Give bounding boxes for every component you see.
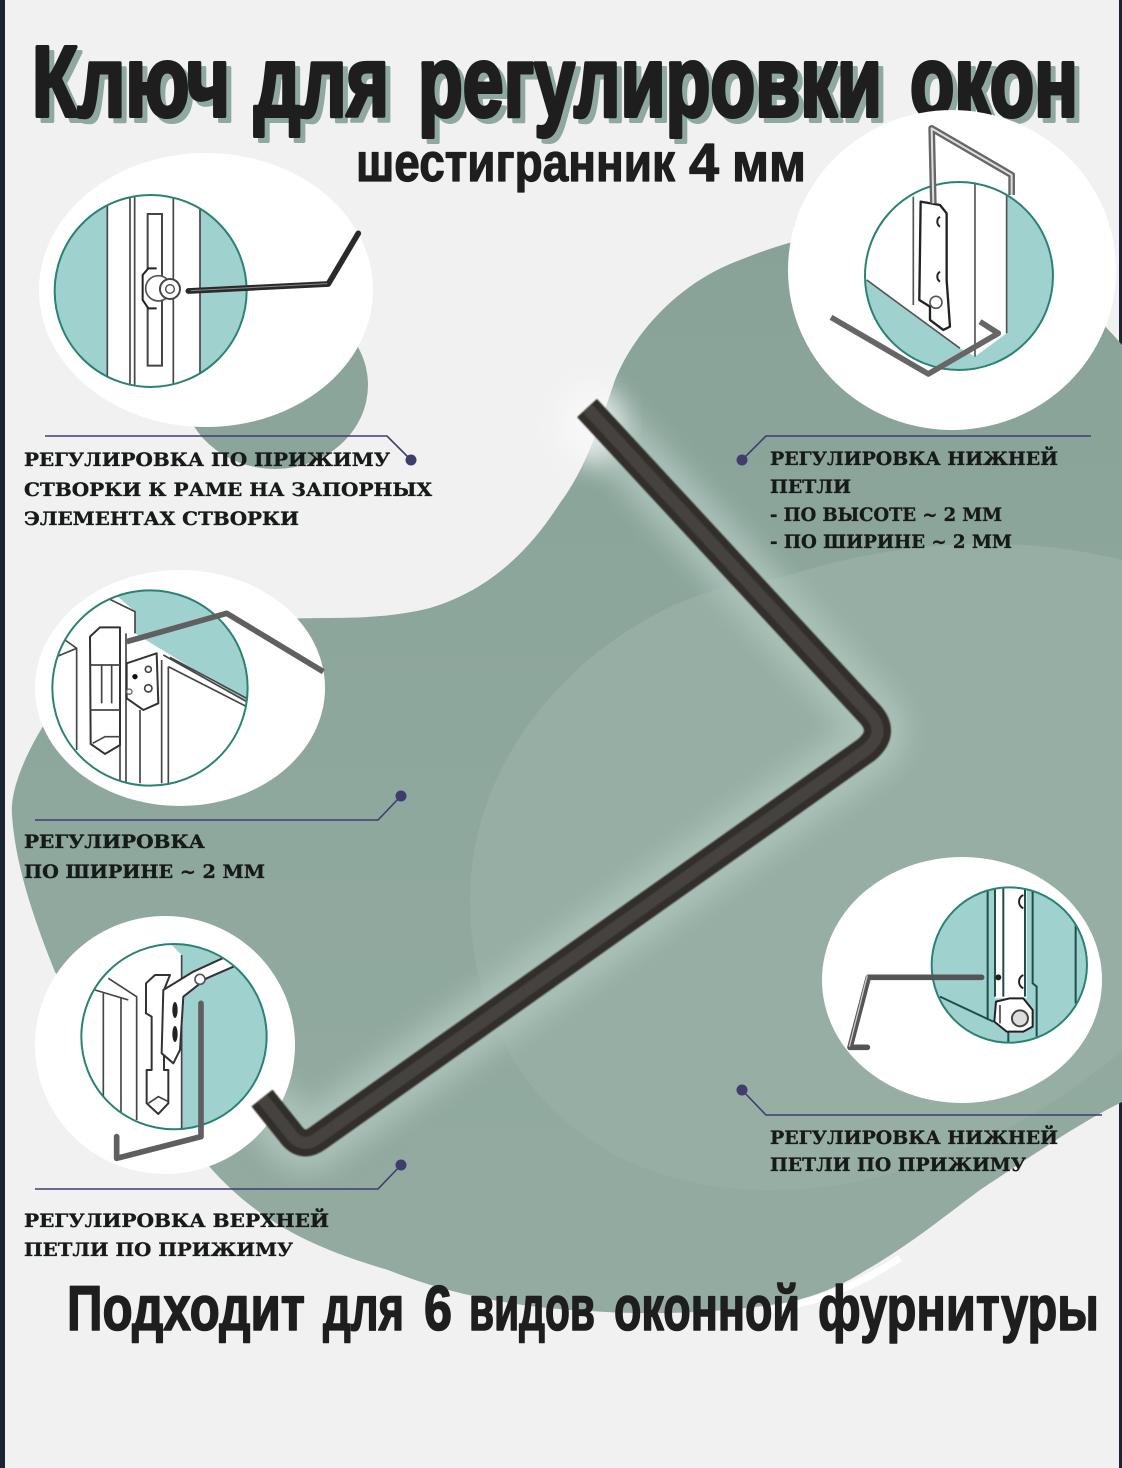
text: lower hinge — [770, 446, 1058, 553]
title: для — [259, 31, 394, 143]
glow at wrench tip — [558, 385, 622, 465]
text: lower hinge: - ПО ВЫСОТЕ ~ 2 ММ — [770, 504, 1002, 526]
panel: lower hinge clamp — [822, 857, 1102, 1103]
subtitle: мм — [732, 133, 806, 193]
small background blob — [182, 301, 368, 469]
panel: upper hinge — [35, 916, 295, 1174]
panel: lower hinge top view — [788, 110, 1116, 430]
text: locking element — [24, 449, 432, 530]
callout line: lower hinge — [736, 436, 1091, 466]
text: locking element: РЕГУЛИРОВКА ПО ПРИЖИМУ — [24, 449, 391, 471]
text: lower hinge: - ПО ШИРИНЕ ~ 2 ММ — [770, 531, 1012, 553]
title — [32, 26, 1083, 143]
text: lower hinge clamp: ПЕТЛИ ПО ПРИЖИМУ — [770, 1154, 1027, 1176]
text: upper hinge: РЕГУЛИРОВКА ВЕРХНЕЙ — [24, 1208, 329, 1232]
title: для — [254, 26, 389, 138]
panel: width adjustment — [35, 570, 325, 806]
text: width — [24, 831, 265, 883]
footer caption: оконной — [614, 1274, 800, 1344]
detail drawing — [55, 190, 358, 390]
detail drawing — [849, 883, 1087, 1047]
callout line: upper hinge — [35, 1160, 406, 1189]
footer caption: видов — [469, 1274, 595, 1344]
detail drawing — [77, 943, 267, 1158]
title: Ключ — [37, 31, 235, 143]
callout line: lower hinge clamp — [736, 1084, 1102, 1115]
callout line: width — [35, 790, 406, 820]
title: Ключ — [32, 26, 230, 138]
subtitle: 4 — [689, 133, 719, 193]
callout line: locking element — [45, 436, 416, 466]
text: locking element: СТВОРКИ К РАМЕ НА ЗАПОРНЫХ — [24, 479, 432, 501]
right dark edge — [1119, 0, 1122, 1468]
text: upper hinge — [24, 1208, 329, 1261]
panel: locking element adjustment — [39, 153, 373, 427]
white bubble — [788, 110, 1116, 430]
text: width: РЕГУЛИРОВКА — [24, 831, 206, 853]
text: lower hinge: ПЕТЛИ — [770, 476, 851, 498]
hex key wrench — [262, 408, 878, 1143]
title: регулировки — [423, 31, 887, 143]
large background blob — [0, 200, 1122, 1330]
text: lower hinge clamp: РЕГУЛИРОВКА НИЖНЕЙ — [770, 1125, 1058, 1149]
footer caption: 6 — [424, 1274, 452, 1344]
text: lower hinge: РЕГУЛИРОВКА НИЖНЕЙ — [770, 446, 1058, 470]
detail drawing — [50, 590, 323, 790]
white bubble — [822, 857, 1102, 1103]
white bubble — [39, 153, 373, 427]
footer caption: для — [323, 1274, 404, 1344]
footer caption: Подходит — [67, 1274, 305, 1344]
white bubble — [35, 916, 295, 1174]
subtitle: шестигранник — [356, 133, 676, 193]
footer caption — [67, 1274, 1099, 1344]
left dark edge — [0, 0, 5, 1468]
white rim under blob — [770, 1258, 900, 1310]
text: locking element: ЭЛЕМЕНТАХ СТВОРКИ — [24, 508, 299, 530]
text: lower hinge clamp — [770, 1125, 1058, 1176]
text: upper hinge: ПЕТЛИ ПО ПРИЖИМУ — [24, 1239, 294, 1261]
text: width: ПО ШИРИНЕ ~ 2 ММ — [24, 861, 265, 883]
title: регулировки — [418, 26, 882, 138]
detail drawing — [831, 128, 1053, 374]
white bubble — [35, 570, 325, 806]
